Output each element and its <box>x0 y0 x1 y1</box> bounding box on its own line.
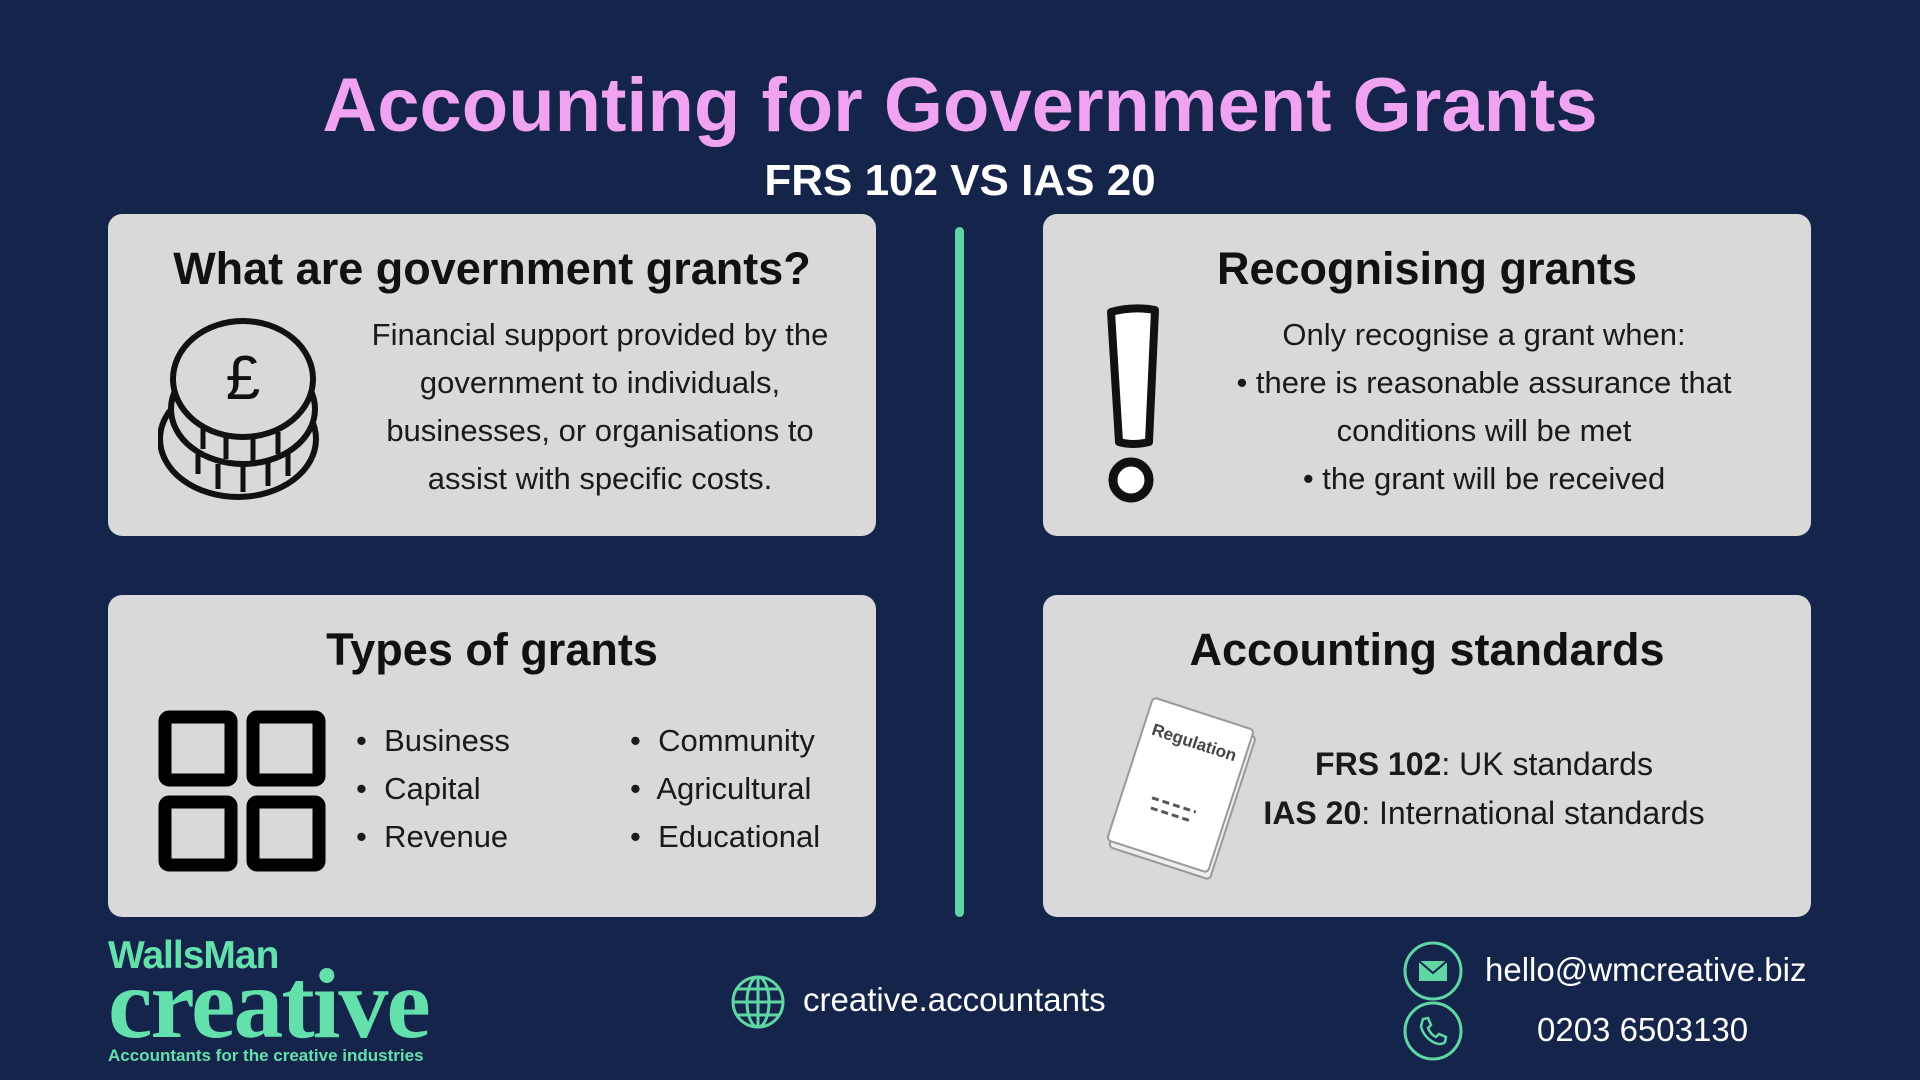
list column 1 <box>356 723 510 854</box>
icon: regulation document <box>1106 697 1256 880</box>
body text: Only recognise a grant when: <box>1282 317 1686 352</box>
body text: assist with specific costs. <box>428 461 772 496</box>
heading: Accounting standards <box>1189 624 1665 675</box>
panel: accounting standards <box>1043 595 1811 917</box>
website <box>732 976 1106 1028</box>
body text <box>372 317 828 496</box>
body text: • there is reasonable assurance that <box>1236 365 1732 400</box>
logo: WallsMan <box>108 934 278 977</box>
list column 2: • Community <box>630 723 815 758</box>
icon: exclamation <box>1107 304 1159 502</box>
list column 2 <box>630 723 820 854</box>
icon: coins: £ <box>226 344 260 413</box>
contact: email <box>1404 942 1806 1000</box>
body text: Financial support provided by the <box>372 317 828 352</box>
panel: recognising grants <box>1043 214 1811 536</box>
icon: email <box>1404 942 1462 1000</box>
logo: creative <box>108 948 429 1059</box>
list column 1: • Business <box>356 723 510 758</box>
icon: regulation document: Regulation <box>1149 720 1239 765</box>
icon: coins <box>158 318 319 500</box>
list column 2: • Educational <box>630 819 820 854</box>
contact: email: hello@wmcreative.biz <box>1485 951 1806 988</box>
body text: businesses, or organisations to <box>386 413 814 448</box>
website: creative.accountants <box>803 981 1106 1018</box>
body text: FRS 102: UK standards <box>1315 746 1653 782</box>
title: Accounting for Government Grants <box>322 63 1598 148</box>
body text <box>1236 317 1732 496</box>
divider <box>955 227 964 917</box>
heading: Recognising grants <box>1217 243 1637 294</box>
icon: globe <box>732 976 784 1028</box>
logo: Accountants for the creative industries <box>108 1046 424 1065</box>
heading: What are government grants? <box>173 243 811 294</box>
heading: Types of grants <box>326 624 658 675</box>
list column 1: • Revenue <box>356 819 508 854</box>
icon: phone <box>1404 1002 1462 1060</box>
list column 2: • Agricultural <box>630 771 811 806</box>
body text: government to individuals, <box>420 365 780 400</box>
contact: phone: 0203 6503130 <box>1537 1011 1748 1048</box>
body text: IAS 20: International standards <box>1263 795 1705 831</box>
icon: grid <box>158 710 326 872</box>
panel: what are government grants <box>108 214 876 536</box>
contact: phone <box>1404 1002 1748 1060</box>
body text: • the grant will be received <box>1303 461 1665 496</box>
panel: types of grants <box>108 595 876 917</box>
body text: conditions will be met <box>1337 413 1631 448</box>
list column 1: • Capital <box>356 771 481 806</box>
subtitle: FRS 102 VS IAS 20 <box>764 156 1156 205</box>
body text <box>1263 746 1705 831</box>
